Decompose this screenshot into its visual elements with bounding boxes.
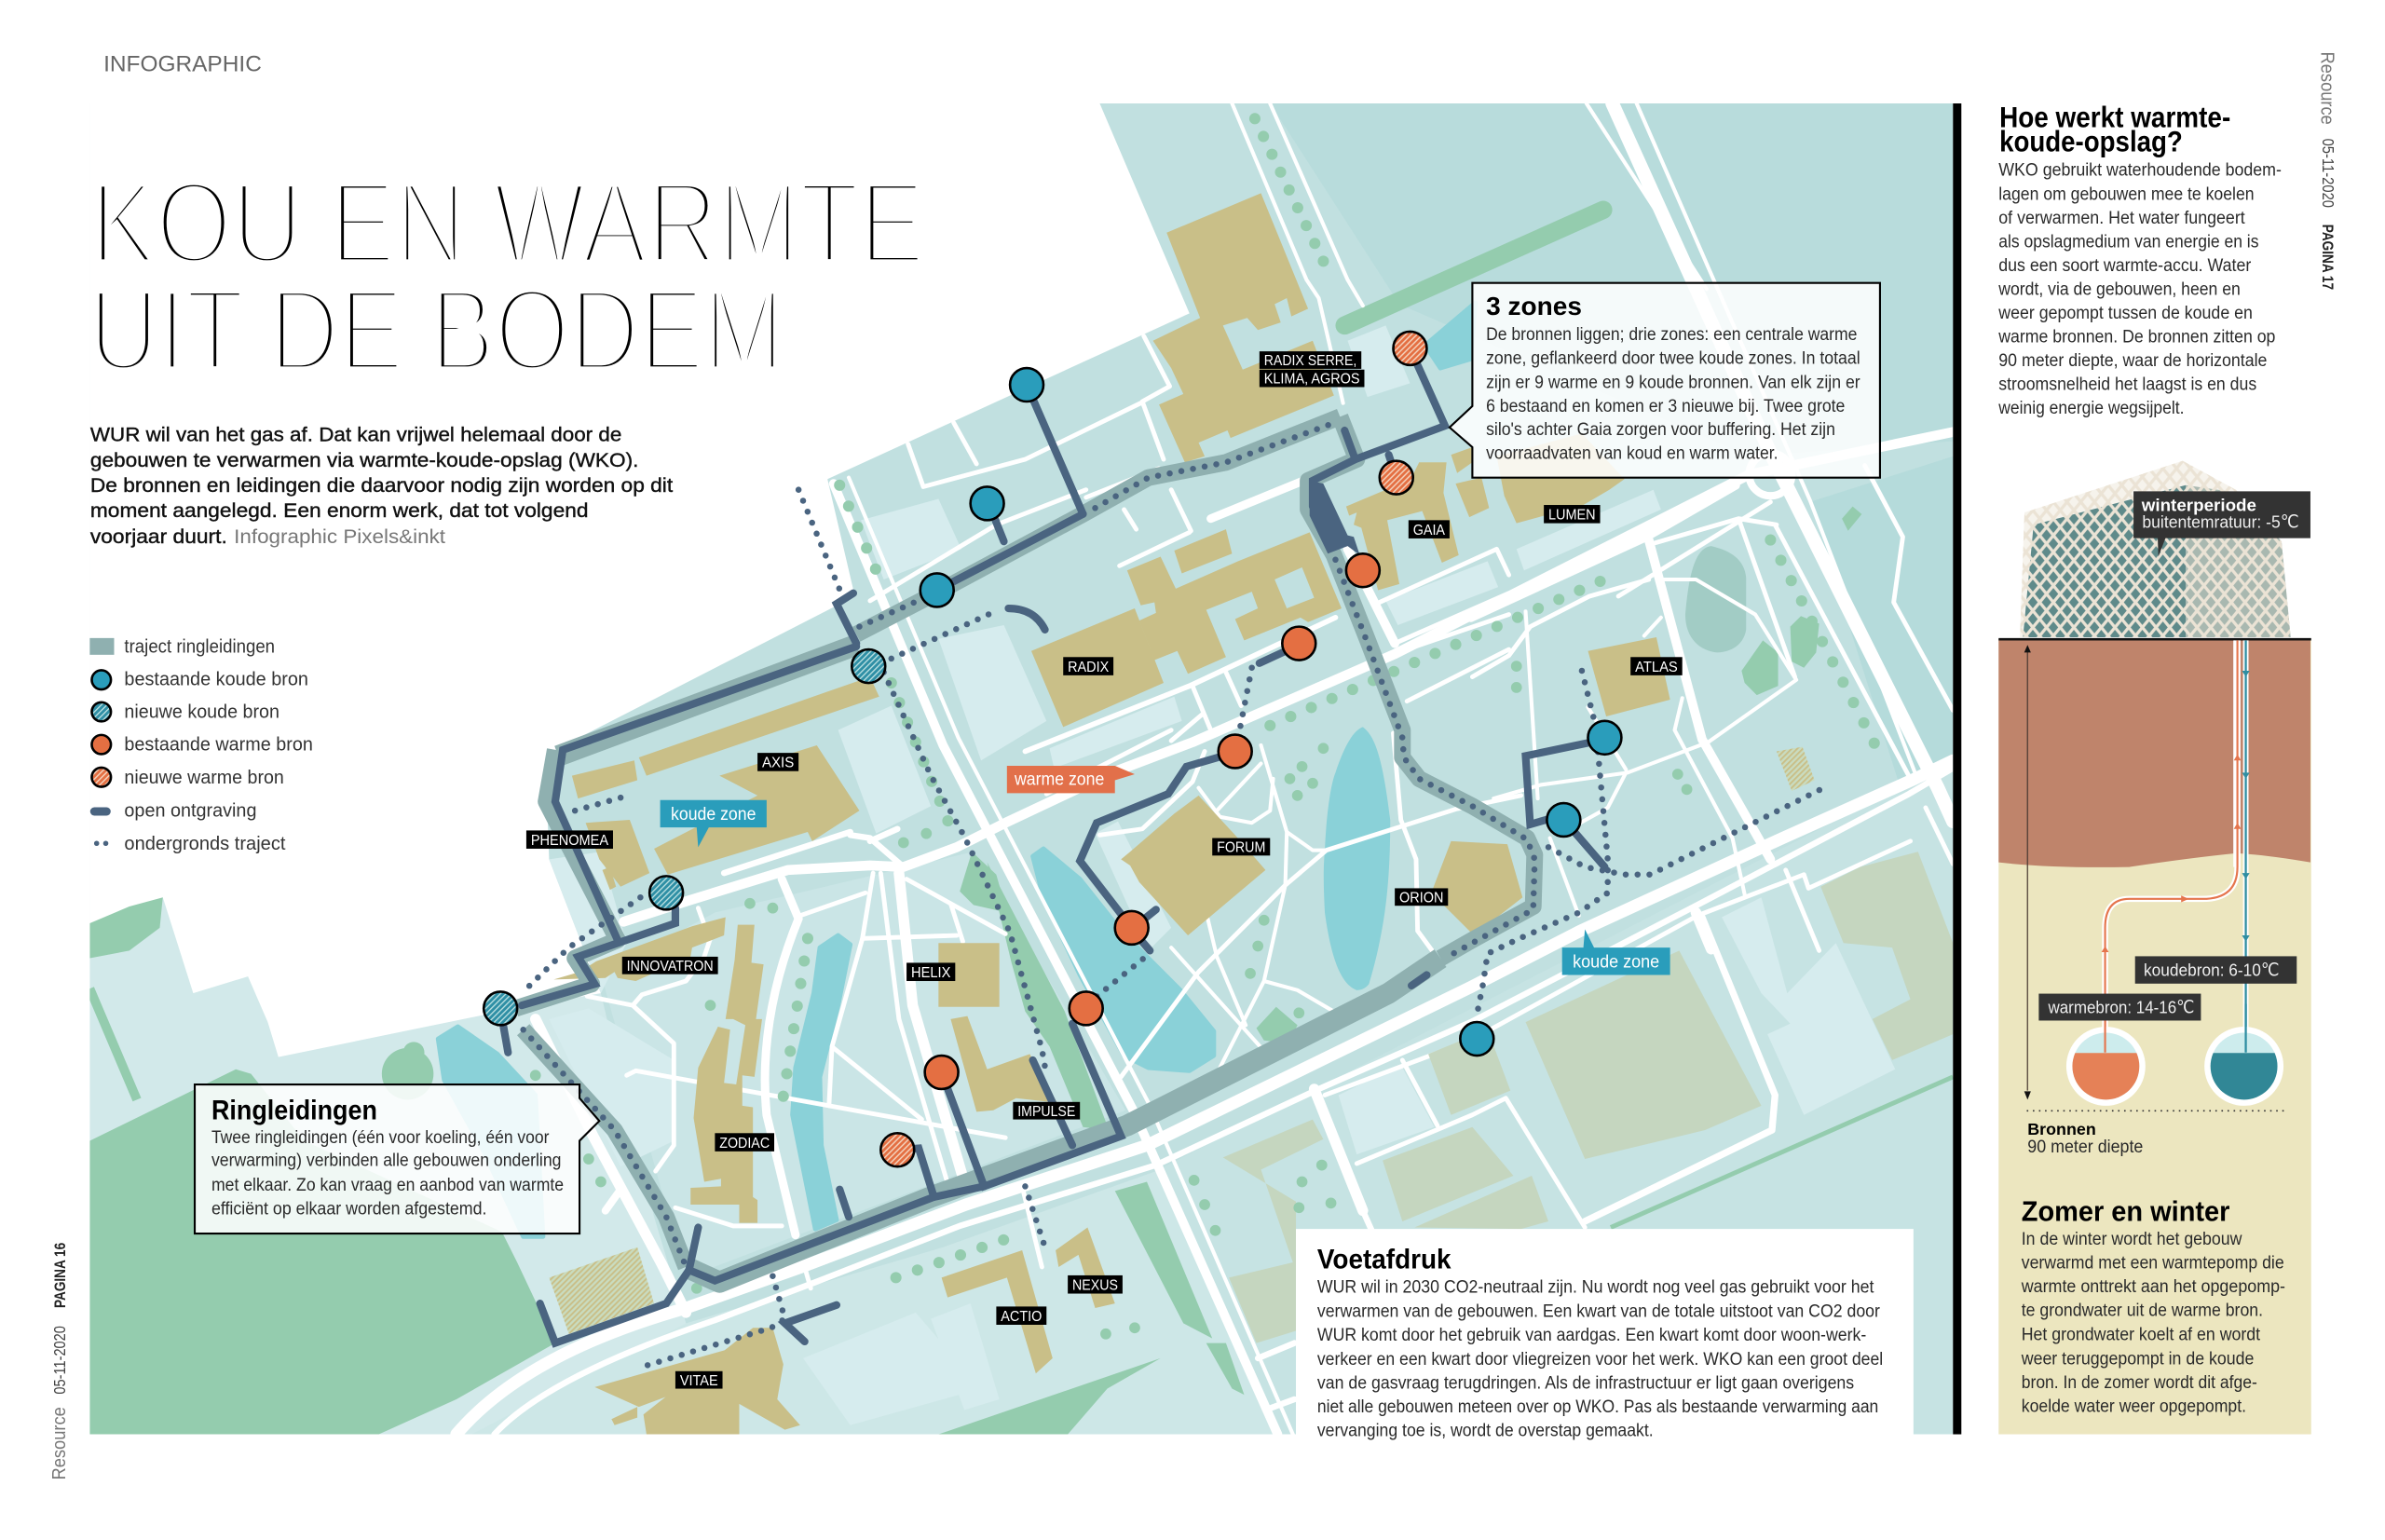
callout: Ringleidingen: efficiënt op elkaar worden afgestemd. <box>211 1199 486 1219</box>
text block: Zomer en winter: warmte onttrekt aan het opgepomp- <box>2021 1277 2285 1297</box>
text block: Voetafdruk <box>1317 1245 1883 1441</box>
tag: koude zone east: koude zone <box>1573 951 1659 972</box>
ring pipeline route bands <box>515 416 1534 1282</box>
text block: Voetafdruk: van de gasvraag terugdringen. Als de infrastructuur er ligt gaan overigens <box>1317 1374 1854 1394</box>
building labels: ZODIAC <box>719 1136 770 1152</box>
warm well <box>2066 1021 2146 1106</box>
white area behind title <box>89 103 1190 1057</box>
tag: warme zone <box>1007 766 1135 793</box>
page label: infographic: INFOGRAPHIC <box>103 52 262 77</box>
title: UIT DE BODEM <box>89 266 784 396</box>
folio right: Resource <box>2316 52 2337 125</box>
text block: Hoe werkt warmte-koude-opslag: stroomsnelheid het laagst is en dus <box>1998 375 2256 394</box>
callout: 3 zones: zone, geflankeerd door twee koude zones. In totaal <box>1486 349 1860 369</box>
label: winterperiode: buitentemratuur: -5℃ <box>2142 512 2299 532</box>
intro text: gebouwen te verwarmen via warmte-koude-opslag (WKO). <box>90 448 638 471</box>
callout: 3 zones: silo's achter Gaia zorgen voor buffering. Het zijn <box>1486 420 1835 440</box>
legend: bestaande warme bron <box>124 735 313 756</box>
roads <box>457 103 1953 1435</box>
white panel behind Voetafdruk <box>1296 1229 1914 1435</box>
text block: Hoe werkt warmte-koude-opslag: warme bronnen. De bronnen zitten op <box>1997 327 2275 347</box>
icon: lattice building <box>2020 461 2291 637</box>
tag: koude zone west: koude zone <box>671 804 756 825</box>
text block: Hoe werkt warmte-koude-opslag: weer gepompt tussen de koude en <box>1997 304 2253 323</box>
callout: Ringleidingen: met elkaar. Zo kan vraag en aanbod van warmte <box>211 1176 564 1195</box>
depth arrow <box>2024 645 2031 1099</box>
legend: ondergronds traject <box>124 834 286 854</box>
legend: nieuwe warme bron <box>124 768 284 788</box>
warm pipe <box>2102 640 2242 1053</box>
text block: Zomer en winter: verwarmd met een warmtepomp die <box>2022 1254 2284 1274</box>
building labels: ACTIO <box>1001 1309 1042 1325</box>
depth line <box>2026 1110 2284 1111</box>
cold well <box>2204 1004 2283 1106</box>
open excavation pipes <box>503 348 1604 1343</box>
intro text: voorjaar duurt. <box>90 525 227 548</box>
callout: 3 zones: 3 zones <box>1486 292 1582 320</box>
building labels: PHENOMEA <box>531 833 609 849</box>
cold pipe <box>2242 640 2250 1053</box>
title <box>89 157 924 396</box>
text block: Hoe werkt warmte-koude-opslag: koude-opslag? <box>1999 125 2183 157</box>
text block: Voetafdruk: Voetafdruk <box>1317 1245 1451 1275</box>
text block: Zomer en winter: bron. In de zomer wordt dit afge- <box>2022 1373 2257 1393</box>
building labels: INNOVATRON <box>627 959 714 974</box>
legend: bestaande koude bron <box>124 669 308 689</box>
text block: Voetafdruk: niet alle gebouwen meteen over op WKO. Pas als bestaande verwarming aan <box>1317 1397 1878 1417</box>
text block: Zomer en winter: Het grondwater koelt af en wordt <box>2022 1325 2261 1344</box>
callout: Ringleidingen: Twee ringleidingen (één voor koeling, één voor <box>211 1128 549 1148</box>
building labels: VITAE <box>680 1373 718 1389</box>
building labels: GAIA <box>1413 523 1446 538</box>
intro text: WUR wil van het gas af. Dat kan vrijwel helemaal door de <box>90 422 621 445</box>
callout: 3 zones: 6 bestaand en komen er 3 nieuwe bij. Twee grote <box>1486 397 1845 416</box>
text block: Hoe werkt warmte-koude-opslag: 90 meter diepte, waar de horizontale <box>1998 351 2267 371</box>
text block: Voetafdruk: WUR komt door het gebruik van aardgas. Een kwart komt door woon-werk- <box>1317 1326 1866 1345</box>
text block: Zomer en winter: te grondwater uit de warme bron. <box>2022 1302 2263 1321</box>
pale buildings <box>549 325 1895 1425</box>
soil layers <box>1998 639 2311 1435</box>
building labels: NEXUS <box>1072 1277 1118 1293</box>
text block: Hoe werkt warmte-koude-opslag: WKO gebruikt waterhoudende bodem- <box>1998 161 2282 181</box>
text block: Hoe werkt warmte-koude-opslag: dus een soort warmte-accu. Water <box>1998 256 2251 276</box>
label: winterperiode <box>2133 491 2310 557</box>
panel: campus map <box>89 103 1953 1435</box>
text block: Zomer en winter: weer teruggepompt in de koude <box>2021 1349 2254 1369</box>
building labels <box>526 351 1683 1389</box>
depth label: Bronnen <box>2027 1120 2096 1138</box>
callout: 3 zones: zijn er 9 warme en 9 koude bronnen. Van elk zijn er <box>1486 373 1860 392</box>
legend <box>89 636 313 854</box>
building labels: RADIX SERRE, <box>1264 353 1356 369</box>
underground dotted routes <box>524 421 1824 1368</box>
folio left: Resource <box>49 1407 70 1480</box>
folio right <box>2316 52 2337 290</box>
building labels: KLIMA, AGROS <box>1264 371 1360 387</box>
text block: Hoe werkt warmte-koude-opslag <box>1997 102 2282 418</box>
folio right: 05-11-2020 <box>2319 139 2337 208</box>
building labels: RADIX <box>1068 660 1110 675</box>
panel: soil cross-section <box>1998 461 2311 1435</box>
folio right: PAGINA 17 <box>2319 225 2336 290</box>
label: warmebron: warmebron: 14-16℃ <box>2048 997 2194 1016</box>
text block: Hoe werkt warmte-koude-opslag: of verwarmen. Het water fungeert <box>1998 209 2245 228</box>
building labels: IMPULSE <box>1017 1104 1075 1120</box>
building labels: AXIS <box>762 756 794 771</box>
text block: Zomer en winter <box>2021 1196 2285 1417</box>
callout: 3 zones: De bronnen liggen; drie zones: een centrale warme <box>1486 325 1857 345</box>
callout: Ringleidingen <box>195 1084 599 1233</box>
tag: warme zone: warme zone <box>1014 769 1104 789</box>
tag: koude zone east <box>1562 930 1670 974</box>
water <box>438 303 1476 1236</box>
depth label: 90 meter diepte <box>2027 1138 2143 1157</box>
text block: Hoe werkt warmte-koude-opslag: Hoe werkt warmte- <box>1999 102 2230 134</box>
text block: Voetafdruk: verkeer en een kwart door vliegreizen voor het werk. WKO kan een groot deel <box>1317 1350 1883 1370</box>
title: KOU EN WARMTE <box>90 157 924 289</box>
buildings <box>549 193 1953 1435</box>
building labels: ATLAS <box>1635 660 1678 675</box>
text block: Voetafdruk: verwarmen van de gebouwen. Een kwart van de totale uitstoot van CO2 door <box>1317 1302 1880 1321</box>
folio left: PAGINA 16 <box>52 1243 69 1308</box>
folio left: 05-11-2020 <box>50 1326 69 1395</box>
callout: 3 zones: voorraadvaten van koud en warm water. <box>1486 444 1779 464</box>
building labels: HELIX <box>911 965 951 981</box>
label: winterperiode: winterperiode <box>2141 496 2256 515</box>
intro text: De bronnen en leidingen die daarvoor nodig zijn worden op dit <box>90 473 673 497</box>
building labels: LUMEN <box>1548 508 1596 524</box>
intro text: moment aangelegd. Een enorm werk, dat tot volgend <box>90 498 589 522</box>
building labels: ORION <box>1399 891 1443 906</box>
intro text <box>90 422 673 548</box>
text block: Voetafdruk: WUR wil in 2030 CO2-neutraal zijn. Nu wordt nog veel gas gebruikt voor het <box>1317 1278 1874 1298</box>
callout: Ringleidingen: verwarming) verbinden alle gebouwen onderling <box>211 1152 561 1171</box>
label: koudebron <box>2135 956 2296 984</box>
text block: Voetafdruk: vervanging toe is, wordt de overstap gemaakt. <box>1317 1422 1654 1441</box>
text block: Hoe werkt warmte-koude-opslag: wordt, via de gebouwen, heen en <box>1997 279 2241 299</box>
legend: traject ringleidingen <box>124 636 275 657</box>
black divider bar <box>1953 103 1961 1435</box>
text block: Zomer en winter: In de winter wordt het gebouw <box>2022 1230 2242 1249</box>
building labels: FORUM <box>1217 840 1265 856</box>
green areas <box>89 210 1953 1435</box>
existing warm sources <box>925 553 1380 1089</box>
label: koudebron: koudebron: 6-10℃ <box>2144 961 2279 980</box>
existing cold sources <box>920 368 1621 1056</box>
callout: Ringleidingen: Ringleidingen <box>211 1096 377 1126</box>
text block: Zomer en winter: Zomer en winter <box>2022 1196 2230 1227</box>
tree rows <box>530 118 1882 1340</box>
tag: koude zone west <box>661 800 767 847</box>
depth label <box>2027 1120 2143 1157</box>
ground line <box>1998 638 2311 640</box>
text block: Zomer en winter: koelde water weer opgepompt. <box>2022 1397 2246 1417</box>
label: warmebron <box>2038 994 2201 1020</box>
callout: 3 zones <box>1450 283 1880 478</box>
text block: Hoe werkt warmte-koude-opslag: als opslagmedium van energie en is <box>1998 232 2258 252</box>
text block: Hoe werkt warmte-koude-opslag: lagen om gebouwen mee te koelen <box>1998 184 2255 204</box>
new warm sources <box>880 332 1426 1166</box>
legend: nieuwe koude bron <box>124 702 279 723</box>
folio left <box>49 1243 70 1480</box>
text block: Hoe werkt warmte-koude-opslag: weinig energie wegsijpelt. <box>1997 399 2184 418</box>
new cold sources <box>484 649 885 1025</box>
intro text: Infographic Pixels&inkt <box>234 525 445 548</box>
legend: open ontgraving <box>124 801 256 822</box>
